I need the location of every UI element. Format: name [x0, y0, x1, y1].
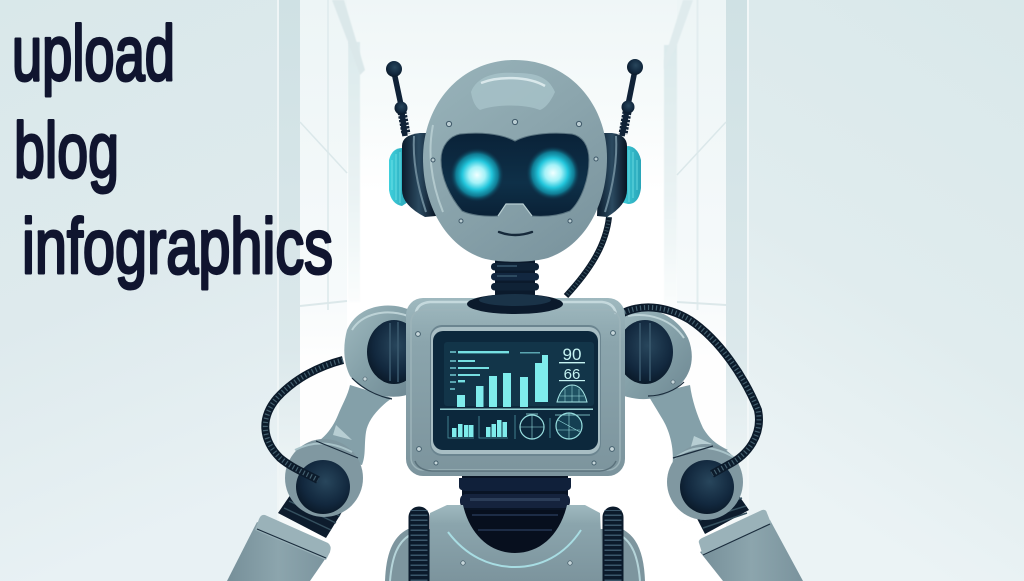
- right wrist bellows: [690, 490, 749, 534]
- hose: right: [602, 517, 624, 581]
- axis labels: [450, 351, 540, 390]
- torso body: [406, 298, 625, 476]
- dome gauge: [557, 385, 587, 402]
- right antenna: [622, 59, 643, 136]
- visor: [441, 133, 589, 216]
- left cable: [265, 360, 343, 480]
- left wrist bellows: [278, 488, 342, 538]
- head shell: [423, 60, 607, 262]
- screen: [433, 331, 598, 450]
- robot lower body: [385, 475, 645, 581]
- divider: [440, 408, 593, 410]
- round gauges: [520, 413, 590, 439]
- left antenna: [386, 61, 408, 136]
- head highlight: [471, 73, 555, 110]
- hose: left: [408, 517, 430, 581]
- title text: [12, 9, 333, 290]
- left ear cup: [389, 133, 436, 217]
- left arm link: [300, 385, 392, 465]
- eyes: [450, 146, 580, 202]
- antennas: [386, 59, 643, 136]
- nose bridge: [498, 204, 532, 216]
- screen numbers: [559, 345, 585, 383]
- right arm link: [648, 385, 728, 470]
- small charts: [452, 420, 507, 437]
- title line: infographics: infographics: [22, 202, 333, 290]
- right cable: [621, 307, 759, 474]
- headphones: [389, 133, 641, 217]
- right elbow: [667, 444, 743, 520]
- screen numbers: 90: [563, 345, 581, 364]
- pelvis: [430, 505, 603, 581]
- left forearm: [227, 522, 330, 581]
- bar chart: [457, 355, 548, 407]
- right forearm: [700, 520, 803, 581]
- head rivets: [431, 119, 598, 223]
- waist bellows: [458, 475, 572, 560]
- title line: upload: upload: [12, 9, 175, 97]
- right shoulder: [618, 309, 692, 399]
- neck base: [467, 294, 563, 314]
- torso: [406, 298, 625, 476]
- right arm: [617, 307, 803, 581]
- chart: horizontal bars: [458, 351, 509, 382]
- screen bezel: [430, 325, 601, 456]
- left arm: [227, 306, 421, 581]
- right ear cup: [597, 133, 641, 217]
- head: [423, 60, 607, 262]
- mouth: [499, 232, 532, 235]
- title line: blog: blog: [14, 106, 119, 194]
- screen numbers: 66: [564, 366, 580, 383]
- headset cable: [566, 217, 609, 296]
- bolts: [416, 331, 615, 465]
- neck: [467, 258, 563, 314]
- left hip: [385, 529, 436, 581]
- left shoulder: [344, 306, 414, 397]
- right hip: [594, 529, 645, 581]
- left elbow: [285, 439, 363, 517]
